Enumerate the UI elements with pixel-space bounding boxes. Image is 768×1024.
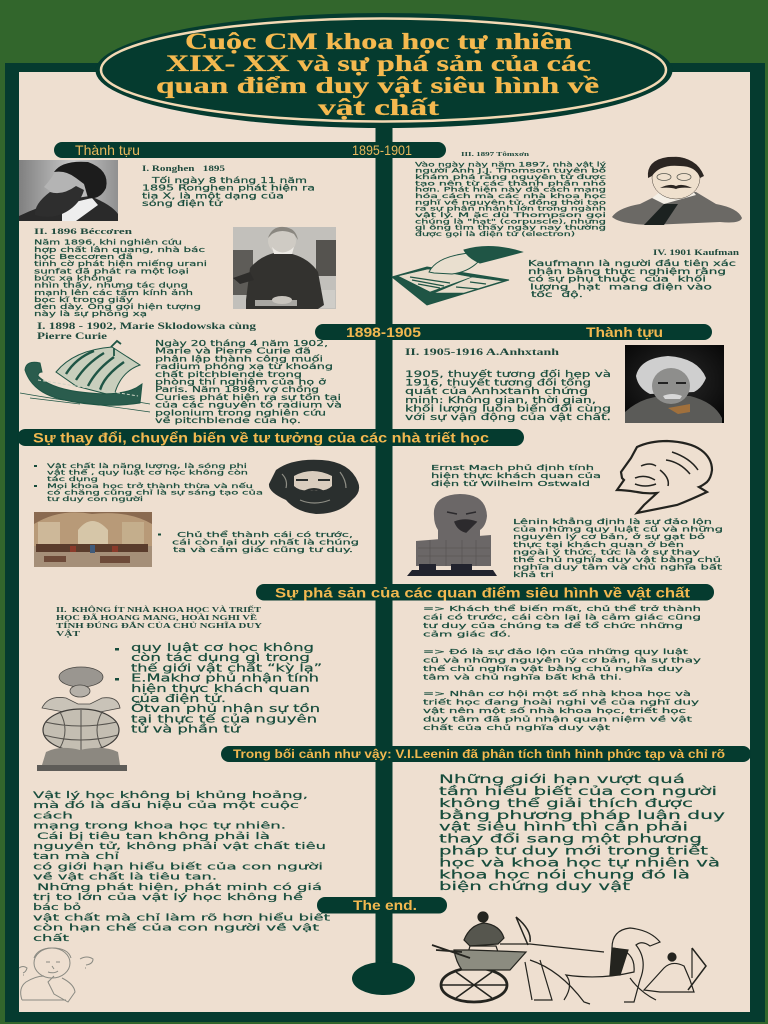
- text: Thomson: nghĩ về nguyên tử, đồng thời tạo: [415, 198, 606, 206]
- text: limits of understanding: vật siêu hình thì cần phải: [439, 820, 688, 834]
- banner: 1898-1905 Thành tựu: Thành tựu: [586, 324, 663, 340]
- text: subject first: cái còn lại duy nhất là chúng: [172, 538, 359, 546]
- text: Beccơren: học Beccơren đã: [34, 252, 133, 261]
- icon: Lenin bust: [407, 494, 497, 576]
- text: Ronghen: [142, 164, 315, 208]
- text: Lenin statement: nghĩa duy tâm và chủ nghĩa bất: [513, 563, 722, 572]
- text: bullets on mechanics: E.Makhơ phủ nhận tính: [131, 673, 319, 685]
- text: physics not in crisis: cách: [33, 811, 73, 821]
- text: Curie body: của các nguyên tố radium và: [155, 401, 342, 410]
- text: bullets on mechanics: còn tác dụng gì trong: [131, 652, 310, 664]
- text: Lenin statement: [513, 517, 723, 579]
- text: Anhxtanh: khối lượng luôn biến đổi cùng: [405, 403, 611, 414]
- text: Thomson: chúng là "hạt" (corpuscle), nhưng: [415, 217, 606, 225]
- text: limits of understanding: Những giới hạn vượt quá: [439, 772, 685, 786]
- text: Curie heading: [37, 322, 256, 342]
- text: Lenin statement: ngoài ý thức, tức là ở sự thay: [513, 547, 700, 556]
- banner: Sự thay đổi: Sự thay đổi, chuyển biến về tư tưởng của các nhà triết học: [33, 430, 489, 446]
- text: limits of understanding: bằng phương pháp luận duy: [439, 808, 725, 822]
- text: Ernst Mach: hiện thực khách quan của: [431, 471, 601, 480]
- banner: 1898-1905 Thành tựu: [315, 324, 712, 340]
- text: conclusions: chất của chủ nghĩa duy vật: [423, 723, 610, 732]
- text: physics not in crisis: bác bỏ: [33, 902, 81, 913]
- text: physics not in crisis: tan mà chỉ: [33, 851, 120, 862]
- text: Kaufmann: tốc độ.: [531, 290, 583, 299]
- text: physics not in crisis: còn hạn chế của con người về vật: [33, 923, 320, 934]
- text: Thomson: hóa cách mà các nhà khoa học: [415, 192, 607, 200]
- icon: thinking man: [19, 948, 93, 1002]
- text: bullets on matter: [34, 462, 263, 503]
- text: Anhxtanh: 1905, thuyết tương đối hẹp và: [405, 369, 611, 380]
- text: subject first: ta và cảm giác cũng tư duy.: [173, 545, 353, 554]
- text: Lenin statement: khả tri: [513, 570, 554, 579]
- text: Beccơren: nhìn thấy, nhưng tác dụng: [34, 281, 188, 290]
- text: conclusions: [423, 604, 701, 732]
- text: physics not in crisis: có giới hạn hiểu biết của con người: [33, 861, 323, 872]
- text: conclusions: => Nhân cơ hội một số nhà khoa học và: [423, 689, 691, 698]
- text: Ernst Mach: điện tử Wilhelm Ostwald: [431, 479, 590, 488]
- text: Thomson: hơn. Phát hiện này đã cách mạng: [415, 186, 606, 194]
- text: Beccơren: bọc kĩ trong giấy: [34, 295, 133, 304]
- text: conclusions: tâm và chủ nghĩa bất khả thi.: [423, 672, 622, 682]
- banner: Thành tựu 1895-1901: 1895-1901: [352, 142, 412, 158]
- title: XIX- XX và sự phá sản của các: [166, 51, 591, 76]
- text: Beccơren: bức xạ không: [34, 274, 113, 282]
- text: bullets on matter: vật thể , quy luật cơ học không còn: [47, 468, 248, 477]
- text: Kaufmann: lượng hạt mang điện vào: [530, 282, 713, 291]
- text: Kaufmann: [528, 248, 740, 299]
- text: Kaufmann: IV. 1901 Kaufman: [653, 248, 740, 257]
- central timeline stem: [352, 120, 415, 995]
- text: Curie body: [155, 339, 342, 425]
- text: Beccơren: II. 1896 Béccơren: [34, 226, 132, 236]
- text: subject first: [158, 530, 359, 554]
- banner: 1898-1905 Thành tựu: 1898-1905: [346, 324, 421, 340]
- text: physics not in crisis: về vật chất là tiêu tan.: [33, 872, 217, 883]
- text: limits of understanding: [439, 772, 725, 893]
- icon: ornate alchemy tree: [37, 667, 127, 771]
- banner: The end: [317, 897, 447, 914]
- text: physics not in crisis: mạng trong khoa học tự nhiên.: [33, 821, 286, 832]
- text: Beccơren: Năm 1896, khi nghiên cứu: [34, 238, 182, 247]
- painting: School of Athens: [34, 512, 152, 567]
- text: bullets on mechanics: tử và phần tử: [131, 724, 241, 736]
- text: bullets on mechanics: quy luật cơ học không: [131, 642, 314, 654]
- text: Curie body: Curies phát hiện ra sự tồn tại: [155, 393, 341, 402]
- text: bullets on matter: có chăng cũng chỉ là sự sáng tạo của: [47, 488, 263, 496]
- text: physics not in crisis: Vật lý học không bị khủng hoảng,: [33, 790, 308, 801]
- text: Anhxtanh: 1916, thuyết tương đối tổng: [405, 378, 591, 389]
- text: bullets on mechanics: hiện thực khách quan: [131, 683, 310, 695]
- text: Ronghen: sóng điện tử: [142, 199, 224, 208]
- text: Kaufmann: có sự phụ thuộc của khối: [528, 275, 706, 284]
- text: limits of understanding: học và khoa học tự nhiên và: [439, 856, 720, 870]
- text: Thomson: được gọi là điện tử (electron): [415, 230, 575, 238]
- text: Thomson: gì ông tìm thấy ngày nay thường: [415, 224, 606, 232]
- banner: Sự phá sản: Sự phá sản của các quan điểm siêu hình về vật chất: [275, 584, 690, 600]
- text: Curie body: Ngày 20 tháng 4 năm 1902,: [155, 339, 328, 348]
- banner: Trong bối cảnh: Trong bối cảnh như vậy: V.I.Leenin đã phân tích tình hình phức tạp và chỉ rõ: [233, 747, 725, 761]
- text: Curie body: Marie và Pierre Curie đã: [155, 347, 311, 356]
- text: conclusions: => Khách thể biến mất, chủ thể trở thành: [423, 604, 701, 613]
- portrait: Marx: [269, 460, 359, 514]
- text: limits of understanding: pháp tư duy mới trong triết: [439, 844, 709, 858]
- text: bullets on mechanics: của điện tử.: [131, 693, 226, 705]
- text: Beccơren: [34, 226, 207, 318]
- text: Lenin statement: thế chủ nghĩa duy vật bằng chủ: [513, 555, 721, 564]
- text: Beccơren: này là sự phóng xạ: [34, 309, 147, 318]
- text: Anhxtanh: minh: Không gian, thời gian,: [405, 395, 596, 406]
- text: Ronghen: I. Ronghen 1895: [142, 164, 225, 173]
- portrait: Lenin line art: [617, 441, 712, 513]
- text: bullets on mechanics: [115, 642, 322, 736]
- text: Anhxtanh: quát của Anhxtanh chứng: [405, 386, 588, 397]
- text: conclusions: => Đó là sự đảo lộn của những quy luật: [423, 647, 688, 656]
- text: Lenin statement: Lênin khẳng định là sự đảo lộn: [513, 517, 712, 526]
- text: Anhxtanh: II. 1905-1916 A.Anhxtanh: [405, 348, 560, 358]
- text: Beccơren: hợp chất lân quang, nhà bác: [34, 245, 205, 254]
- photo: Ronghen: [19, 160, 118, 221]
- title: vật chất: [318, 95, 440, 120]
- text: Thomson: tạo nên từ các thành phần nhỏ: [415, 179, 606, 187]
- text: Thomson: vật lý. M ặc dù Thompson gọi: [415, 211, 607, 219]
- text: Curie body: polonium trong nghiên cứu: [155, 408, 326, 417]
- text: subject first: Chủ thể thành cái có trước,: [177, 530, 353, 539]
- text: conclusions: duy tâm đã phủ nhận quan niệm về vật: [423, 714, 692, 724]
- text: Ronghen: Tối ngày 8 tháng 11 năm: [150, 176, 307, 185]
- text: Curie body: radium phóng xạ từ khoáng: [155, 362, 333, 371]
- banner: Thành tựu 1895-1901: Thành tựu: [75, 142, 140, 158]
- text: conclusions: cũ và những nguyên lý cơ bản, là sự thay: [423, 656, 701, 664]
- text: Lenin statement: của những quy luật cũ và những: [513, 525, 723, 534]
- text: Thomson: ra sự phân nhánh lớn trong ngành: [415, 205, 606, 213]
- text: Anhxtanh: với sự vận động của vật chất.: [405, 412, 611, 423]
- text: bullets on matter: tư duy con người: [47, 495, 143, 503]
- text: Thomson: III. 1897 Tômxơn: [461, 151, 530, 158]
- text: physics not in crisis: vật chất mà chỉ làm rõ hơn hiểu biết: [33, 912, 331, 923]
- text: Kaufmann: nhận bằng thực nghiệm rằng: [528, 267, 726, 276]
- text: Curie body: chất pitchblende trong: [155, 370, 302, 379]
- text: Thomson: [415, 151, 607, 238]
- text: limits of understanding: biện chứng duy vật: [439, 879, 631, 893]
- text: conclusions: tư duy của chúng ta để tổ chức những: [423, 621, 683, 630]
- text: physics not in crisis: chất: [33, 933, 70, 944]
- text: bullets on matter: tác dụng: [47, 475, 98, 483]
- text: Lenin statement: nguyên lý cơ bản, ở sự gạt bỏ: [513, 532, 705, 541]
- text: serif subheading: VẬT: [56, 629, 80, 638]
- icon: book and hand: [392, 246, 522, 305]
- icon: viking ship: [20, 341, 150, 412]
- text: serif subheading: HỌC ĐÃ HOANG MANG, HOÀI NGHI VỀ: [56, 612, 257, 622]
- photo: Becquerel: [233, 227, 336, 309]
- text: Ronghen: 1895 Ronghen phát hiện ra: [142, 184, 315, 193]
- text: limits of understanding: tầm hiểu biết của con người: [439, 784, 717, 798]
- text: bullets on mechanics: tại thực tế của nguyên: [131, 713, 317, 725]
- text: Beccơren: mạnh lên các tấm kính ảnh: [34, 288, 193, 297]
- text: Ronghen: tia X, là một dạng của: [142, 191, 284, 200]
- text: Thomson: Vào ngày này năm 1897, nhà vật lý: [415, 160, 607, 168]
- text: Thomson: người Anh J.J. Thomson tuyên bố: [415, 167, 606, 175]
- text: bullets on matter: Vật chất là năng lượng, là sóng phi: [47, 462, 248, 470]
- text: conclusions: triết học đang hoài nghi về của nghĩ duy: [423, 698, 699, 706]
- banner: The end: The end.: [353, 897, 417, 913]
- text: serif subheading: II. KHÔNG ÍT NHÀ KHOA HỌC VÀ TRIẾT: [56, 604, 261, 614]
- text: conclusions: cái có trước, cái còn lại là cảm giác cũng: [423, 612, 701, 622]
- text: Kaufmann: Kaufmann là người đầu tiên xác: [528, 259, 736, 268]
- text: Curie body: phân lập thành công muối: [155, 354, 323, 363]
- text: bullets on mechanics: Ốtvan phủ nhận sự tồn: [131, 701, 320, 715]
- text: Ernst Mach: [431, 463, 601, 488]
- text: Curie heading: Pierre Curie: [37, 332, 107, 342]
- text: bullets on matter: Mọi khoa học trở thành thừa và nếu: [47, 482, 253, 490]
- text: serif subheading: [56, 604, 263, 638]
- text: Thomson: khám phá rằng nguyên tử được: [415, 172, 607, 181]
- text: bullets on mechanics: thế giới vật chất “kỳ lạ”: [131, 662, 322, 674]
- title: [156, 29, 599, 120]
- text: Curie body: phòng thí nghiệm của họ ở: [155, 378, 327, 386]
- text: physics not in crisis: Cái bị tiêu tan không phải là: [37, 831, 270, 842]
- text: physics not in crisis: Những phát hiện, phát minh có giá: [37, 882, 322, 893]
- text: limits of understanding: thay đổi sang một phương: [439, 832, 702, 846]
- text: limits of understanding: không thể giải thích được: [439, 796, 693, 810]
- portrait: Thomson: [612, 157, 742, 225]
- text: physics not in crisis: [33, 790, 331, 944]
- text: Beccơren: tinh cờ phát hiện miếng urani: [34, 259, 207, 268]
- text: Ernst Mach: Ernst Mach phủ định tính: [431, 463, 594, 472]
- text: conclusions: cảm giác đó.: [423, 630, 511, 638]
- text: Beccơren: đen dày. Ông gọi hiện tượng: [34, 302, 201, 311]
- text: physics not in crisis: trị to lớn của vật lý học không hề: [33, 892, 303, 903]
- text: conclusions: vật nên một số nhà khoa học, triết học: [423, 706, 686, 715]
- text: Beccơren: sunfat đã phát ra một loại: [34, 266, 189, 275]
- text: Anhxtanh: [405, 348, 611, 423]
- photo: Einstein: [625, 345, 724, 423]
- text: conclusions: thế chủ nghĩa vật bằng chủ nghĩa duy: [423, 664, 683, 673]
- text: limits of understanding: khoa học nói chung đó là: [439, 868, 690, 882]
- banner: Thành tựu 1895-1901: [54, 142, 446, 158]
- title ellipse: [96, 13, 672, 128]
- text: serif subheading: TÍNH ĐÚNG ĐẮN CỦA CHỦ NGHĨA DUY: [56, 620, 263, 630]
- text: physics not in crisis: nguyên tử, không phải vật chất tiêu: [33, 841, 326, 852]
- title: Cuộc CM khoa học tự nhiên: [185, 29, 572, 54]
- text: Curie body: về pitchblende của họ.: [155, 416, 301, 425]
- text: physics not in crisis: mà đó là dấu hiệu của một cuộc: [33, 800, 300, 811]
- title: quan điểm duy vật siêu hình về: [156, 73, 599, 98]
- text: Lenin statement: thực tại khách quan ở bên: [513, 540, 684, 549]
- text: Curie body: Paris. Năm 1898, vợ chồng: [155, 385, 319, 394]
- illustration: chariot and archers: [432, 912, 706, 1004]
- text: Curie heading: I. 1898 - 1902, Marie Sklodowska cùng: [37, 322, 256, 332]
